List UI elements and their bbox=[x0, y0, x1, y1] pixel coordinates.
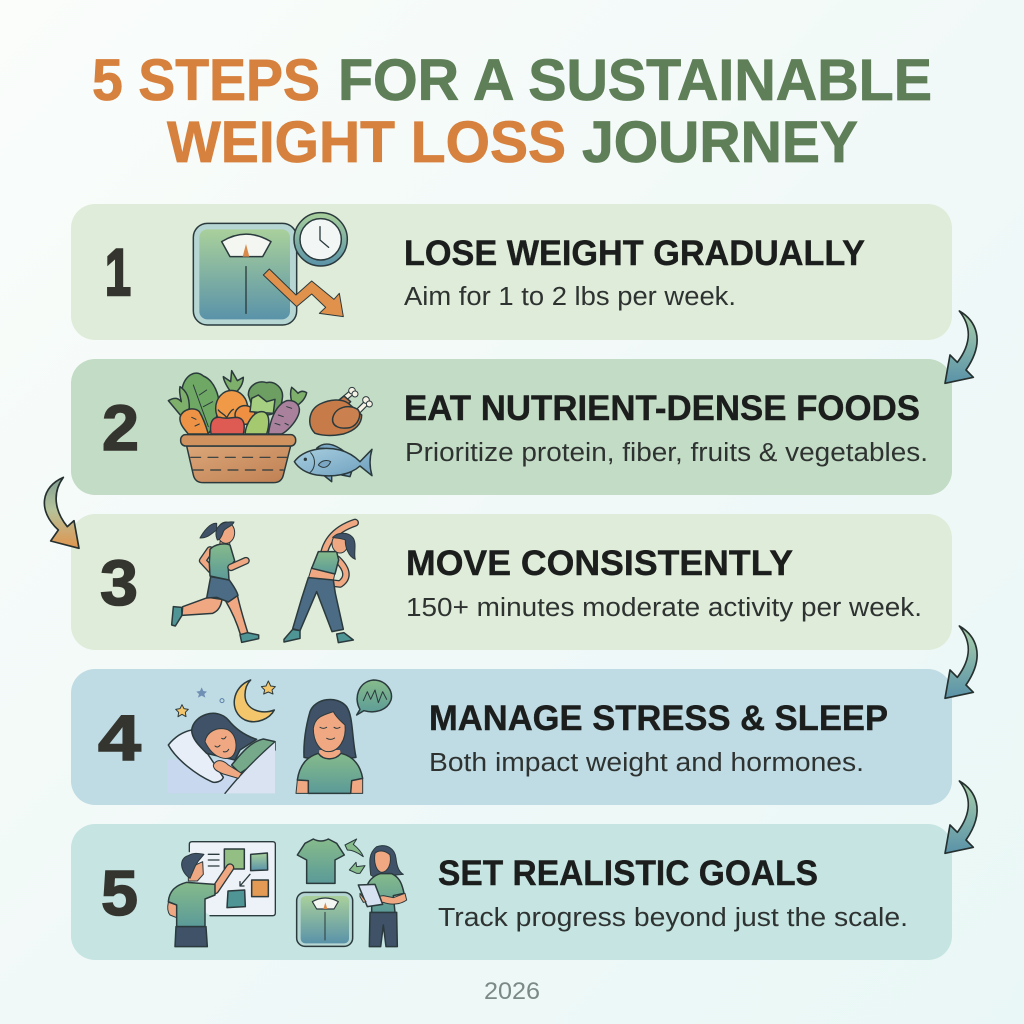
heading: SET REALISTIC GOALS bbox=[438, 854, 818, 893]
arrow: step 4 to 5 bbox=[945, 781, 977, 853]
description: Both impact weight and hormones. bbox=[429, 749, 864, 777]
panel: step 5 bbox=[71, 824, 952, 960]
panel: step 1 bbox=[71, 204, 952, 340]
heading: MANAGE STRESS & SLEEP bbox=[429, 699, 888, 738]
description: Prioritize protein, fiber, fruits & vegetables. bbox=[405, 439, 928, 467]
year label: 2026 bbox=[484, 978, 540, 1005]
title: 5 STEPS bbox=[92, 48, 320, 113]
icon: scale with clock and falling arrow bbox=[193, 213, 347, 325]
icon: sleeping woman, moon and calm woman bbox=[167, 680, 391, 793]
panel: step 3 bbox=[71, 514, 952, 650]
panel: step 2 bbox=[71, 359, 952, 495]
number 3: 3 bbox=[100, 547, 138, 619]
title: FOR A SUSTAINABLE bbox=[338, 48, 932, 113]
arrow: step 1 to 2 bbox=[945, 311, 977, 383]
panel: step 4 bbox=[71, 669, 952, 805]
title: WEIGHT LOSS bbox=[167, 110, 566, 175]
description: Track progress beyond just the scale. bbox=[438, 904, 908, 932]
description: 150+ minutes moderate activity per week. bbox=[406, 594, 922, 622]
title: JOURNEY bbox=[582, 110, 858, 175]
number 4: 4 bbox=[98, 702, 141, 774]
number 2: 2 bbox=[102, 392, 139, 464]
heading: EAT NUTRIENT-DENSE FOODS bbox=[404, 389, 920, 428]
arrow: step 2 to 3 bbox=[44, 477, 79, 548]
heading: LOSE WEIGHT GRADUALLY bbox=[404, 234, 865, 273]
arrow: step 3 to 4 bbox=[945, 626, 977, 698]
title bbox=[92, 48, 932, 175]
icon: runner and stretching woman bbox=[172, 522, 355, 643]
number 5: 5 bbox=[101, 857, 138, 929]
icon: vegetable basket, chicken and fish bbox=[168, 371, 372, 483]
number 1: 1 bbox=[105, 235, 131, 309]
heading: MOVE CONSISTENTLY bbox=[406, 544, 793, 583]
icon: goal board, shirt, scale and woman with clipboard bbox=[168, 839, 407, 947]
description: Aim for 1 to 2 lbs per week. bbox=[404, 283, 736, 311]
